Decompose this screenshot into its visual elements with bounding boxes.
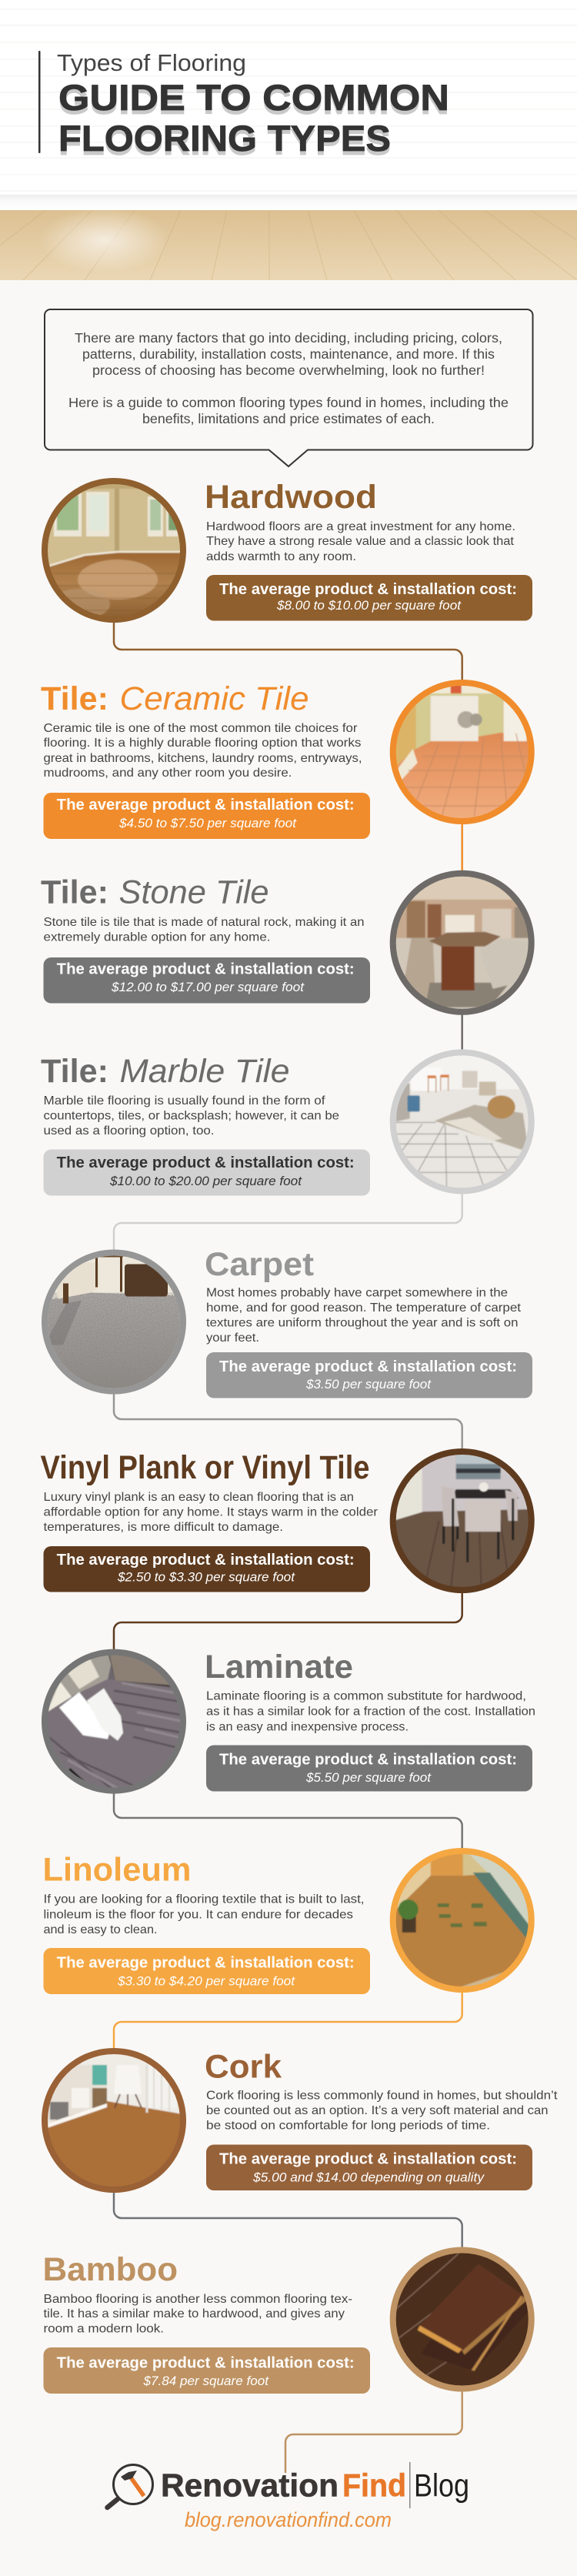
body text: Laminate flooring is a common substitute for hardwood, [206,1690,526,1702]
body text: used as a flooring option, too. [43,1124,214,1138]
body text [206,2089,558,2132]
body text [206,1287,522,1345]
footer logo [108,2462,469,2531]
body text: and is easy to clean. [43,1923,157,1936]
body text: extremely durable option for any home. [43,931,270,944]
wordmark: Blog: Blog [414,2467,469,2503]
cost box: $2.50 to $3.30 per square foot [117,1570,295,1584]
cost box [43,793,370,839]
cost box [206,575,532,620]
body text: be counted out as an option. It’s a very soft material and can [206,2104,548,2117]
heading: Bamboo: Bamboo [43,2251,178,2288]
heading: Linoleum: Linoleum [43,1852,192,1889]
body text: adds warmth to any room. [206,550,356,563]
cost box [43,1948,370,1994]
intro text [68,330,509,426]
panel: linoleum [43,1848,535,1994]
heading: Tile: Marble Tile: Tile: [41,1053,108,1090]
panel: marble tile [41,1049,535,1196]
body text: as it has a similar look for a fraction of the cost. Installation [206,1706,535,1718]
body text: home, and for good reason. The temperature of carpet [206,1301,522,1315]
connector lines [114,620,462,2473]
cost box [206,2144,532,2190]
header: room wall and wood floor [0,0,577,280]
body text [206,1690,535,1733]
cost box: The average product & installation cost: [57,1955,355,1972]
panel: stone tile [41,870,535,1015]
icon: magnifier with hammer [108,2464,152,2508]
photo: bamboo planks [390,2247,535,2392]
photo: laundry room with terracotta tile [390,680,535,824]
cost box: $10.00 to $20.00 per square foot [109,1174,302,1188]
heading: Tile: Marble Tile [41,1053,289,1090]
panel: laminate [42,1649,535,1794]
body text: be stood on comfortable for long periods of time. [206,2120,490,2132]
body text: If you are looking for a flooring textile that is built to last, [43,1893,364,1906]
intro text: benefits, limitations and price estimates of each. [142,411,435,426]
cost box [43,1546,370,1592]
panel: cork [42,2048,558,2193]
panel: hardwood [42,478,532,623]
cost box: $5.00 and $14.00 depending on quality [252,2170,485,2184]
photo: hardwood room [42,478,186,623]
body text: your feet. [206,1331,259,1345]
body text: flooring. It is a highly durable flooring option that works [43,737,362,750]
panel: vinyl plank [40,1448,535,1593]
body text: Ceramic tile is one of the most common tile choices for [43,722,358,735]
body text [43,2293,352,2335]
body text [43,1491,379,1534]
intro text: There are many factors that go into deciding, including pricing, colors, [75,330,502,346]
cost box: The average product & installation cost: [219,581,517,598]
body text [43,1893,364,1936]
heading: Vinyl Plank or Vinyl Tile: Vinyl Plank or Vinyl Tile [40,1449,369,1486]
body text: linoleum is the floor for you. It can endure for decades [43,1909,353,1921]
body text: Most homes probably have carpet somewhere in the [206,1287,508,1299]
intro text: process of choosing has become overwhelming, look no further! [92,363,485,378]
heading line 1: GUIDE TO COMMON [58,81,449,122]
body text: countertops, tiles, or backsplash; however, it can be [43,1110,339,1122]
panel: bamboo [43,2247,535,2394]
heading: Tile: Ceramic Tile [41,680,309,717]
wordmark: RenovationFind: Renovation [161,2467,339,2503]
body text: Luxury vinyl plank is an easy to clean flooring that is an [43,1491,354,1504]
cost box: The average product & installation cost: [57,797,355,814]
cost box: $12.00 to $17.00 per square foot [111,981,305,994]
heading: Hardwood: Hardwood [205,479,377,516]
cost box: $3.30 to $4.20 per square foot [117,1975,295,1989]
callout: intro speech box [45,309,532,466]
intro text: patterns, durability, installation costs, maintenance, and more. If this [82,346,495,362]
body text: They have a strong resale value and a classic look that [206,535,515,548]
body text: Stone tile is tile that is made of natural rock, making it an [43,916,365,929]
heading line 2: FLOORING TYPES [58,122,391,162]
body text: affordable option for any home. It stays warm in the colder [43,1505,379,1519]
subtitle: Types of Flooring: Types of Flooring [57,49,246,76]
heading: Tile: Stone Tile: Stone Tile [118,874,269,911]
photo: white marble floor with rug [390,1049,535,1194]
cost box: The average product & installation cost: [219,2150,517,2167]
photo: nursery with cork floor [42,2048,186,2193]
heading: Tile: Marble Tile: Marble Tile [120,1053,289,1090]
body text: Hardwood floors are a great investment for any home. [206,520,515,533]
cost box: The average product & installation cost: [219,1752,517,1769]
body text: tile. It has a similar make to hardwood, and gives any [43,2307,345,2320]
title block [38,49,449,162]
body text: mudrooms, and any other room you desire. [43,767,292,780]
cost box: The average product & installation cost: [57,961,355,977]
website url: blog.renovationfind.com [185,2508,392,2531]
heading line 1: GUIDE TO COMMON [58,77,449,118]
body text: great in bathrooms, kitchens, laundry rooms, entryways, [43,752,362,765]
cost box: $3.50 per square foot [305,1378,432,1392]
cost box: The average product & installation cost: [219,1358,517,1375]
body text [206,520,515,563]
divider [409,2462,411,2508]
intro text: Here is a guide to common flooring types found in homes, including the [68,395,509,410]
cost box: $5.50 per square foot [305,1771,432,1785]
heading: Tile: Ceramic Tile: Ceramic Tile [120,680,309,717]
cost box: $4.50 to $7.50 per square foot [118,817,297,830]
cost box: The average product & installation cost: [57,1552,355,1569]
heading: Tile: Stone Tile [41,874,269,911]
cost box [43,2347,370,2394]
body text: Bamboo flooring is another less common flooring tex- [43,2293,352,2306]
photo: kitchen with stone floor [390,870,535,1015]
cost box: The average product & installation cost: [57,1154,355,1171]
body text [43,722,362,780]
heading: Laminate: Laminate [205,1649,353,1686]
cost box [43,1150,370,1196]
heading: Tile: Stone Tile: Tile: [41,874,108,911]
body text: textures are uniform throughout the year and is soft on [206,1316,519,1330]
body text [43,916,365,944]
body text: room a modern look. [43,2323,164,2335]
panel: carpet [42,1246,532,1398]
body text: Cork flooring is less commonly found in homes, but shouldn’t [206,2089,558,2103]
wordmark: RenovationFind: Find [342,2467,406,2503]
photo: linoleum hallway [390,1848,535,1993]
photo: dining room [390,1448,535,1593]
body text: temperatures, is more difficult to damage. [43,1521,283,1534]
cost box: $7.84 per square foot [142,2374,269,2388]
heading: Tile: Ceramic Tile: Tile: [41,680,108,717]
cost box: The average product & installation cost: [57,2355,355,2372]
body text: Marble tile flooring is usually found in the form of [43,1094,325,1108]
cost box [206,1352,532,1398]
cost box [206,1746,532,1792]
heading: Carpet: Carpet [205,1246,314,1283]
body text: is an easy and inexpensive process. [206,1721,409,1733]
photo: carpeted bedroom [42,1250,186,1395]
heading line 2: FLOORING TYPES [58,118,391,159]
body text [43,1094,339,1138]
panel: ceramic tile [41,680,535,839]
cost box: $8.00 to $10.00 per square foot [276,599,462,613]
cost box [43,957,370,1004]
heading: Cork: Cork [205,2049,282,2086]
photo: grey laminate floor [42,1649,186,1794]
